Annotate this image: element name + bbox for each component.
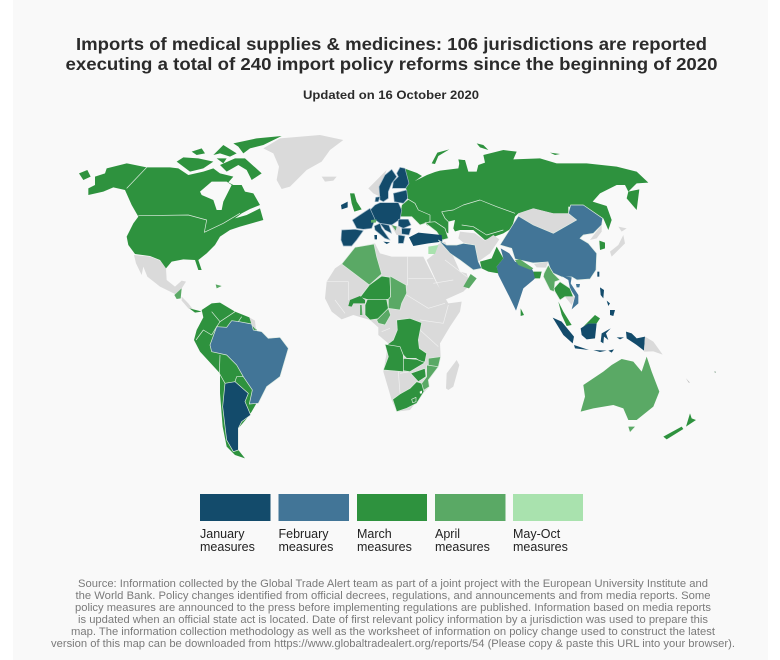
India (497, 248, 542, 311)
Africa and Arabia (325, 242, 470, 412)
Tasmania (628, 427, 635, 432)
grey base of Africa (325, 243, 462, 412)
Oman and Syria (428, 245, 477, 288)
source note: version of this map can be downloaded from https://www.globaltradealert.org/reports/54 (Please copy & paste this URL into your browser). (51, 638, 735, 650)
title: Imports of medical supplies & medicines: 106 jurisdictions are reported (76, 34, 707, 54)
Russia and Central Asia (403, 150, 648, 240)
legend: February (278, 494, 349, 554)
source note: is updated when an official state act is located. Date of first relevant policy information by a jurisdiction was used to prepare this (78, 614, 708, 626)
Bangladesh (533, 272, 542, 278)
Vietnam (562, 276, 578, 309)
legend: May-Oct: May-Oct (513, 527, 561, 541)
grey base of Arabia and Iraq (427, 242, 470, 299)
Democratic Republic of Congo (387, 318, 427, 363)
Denmark (375, 197, 380, 202)
legend: May-Oct (513, 494, 583, 554)
Mexico (134, 255, 186, 294)
Angola (383, 344, 403, 372)
Sulawesi (601, 328, 611, 343)
Arctic islands (432, 143, 560, 170)
Greenland and Iceland (263, 135, 343, 189)
Borneo (581, 323, 597, 339)
Belarus and Ukraine (400, 199, 430, 225)
legend: January: measures (200, 540, 255, 554)
Thailand and Laos (554, 282, 573, 300)
French Guiana (249, 317, 256, 330)
Croatia (380, 223, 392, 233)
Europe and Turkey (341, 167, 448, 246)
Northern Borneo (583, 315, 600, 327)
Algeria (342, 244, 382, 285)
Switzerland (371, 219, 377, 223)
Hudson Bay (200, 182, 232, 210)
Burkina Faso (348, 296, 365, 307)
title (66, 34, 718, 74)
Baltics (393, 190, 408, 203)
France (352, 208, 375, 229)
Japan (610, 227, 627, 257)
South and Southeast Asia (480, 247, 599, 326)
Turkey (409, 233, 442, 246)
Argentina (223, 382, 251, 452)
Greece (398, 235, 405, 243)
Lesotho (412, 397, 416, 403)
Germany Poland and central Europe (370, 203, 402, 225)
Brazil (210, 321, 288, 404)
source note: the World Bank. Policy changes identified from official decrees, regulations, and announcements and from media reports. Some (76, 590, 710, 602)
legend (200, 494, 583, 554)
Bosnia (392, 225, 397, 231)
South Korea (599, 241, 605, 250)
Canada-US border (127, 167, 147, 188)
Afghanistan and Iraq neighbours (458, 232, 499, 262)
Zimbabwe (411, 368, 426, 382)
Cameroon (377, 308, 391, 325)
internal borders (196, 312, 220, 340)
Central America (174, 284, 222, 313)
Philippines (600, 287, 615, 316)
grey country borders (327, 257, 467, 393)
source note: map. The information collection methodology as well as the worksheet of information on policy change used to construct the latest (71, 626, 715, 638)
Spain and Portugal (341, 229, 363, 246)
Papua New Guinea (644, 337, 663, 355)
New Caledonia (686, 378, 690, 383)
Madagascar (446, 360, 459, 390)
legend: March (357, 494, 427, 554)
Nigeria (365, 299, 388, 320)
Norway (368, 170, 387, 197)
Malay Peninsula (558, 302, 572, 326)
legend: April: April (435, 527, 460, 541)
Canada and United States (70, 163, 263, 270)
Eurasia north: Russia and China (403, 143, 648, 280)
legend: March: March (357, 527, 392, 541)
Caspian Sea (448, 220, 460, 243)
Hainan and Taiwan (576, 272, 599, 287)
Alaska islands and Arctic archipelago (79, 136, 282, 180)
legend: April: measures (435, 540, 490, 554)
title: executing a total of 240 import policy reforms since the beginning of 2020 (66, 54, 718, 74)
Caucasus (425, 222, 448, 240)
North Korea (590, 225, 602, 240)
Kazakhstan border (442, 200, 515, 213)
Finland (392, 167, 409, 188)
Myanmar (543, 265, 560, 292)
Italy (374, 223, 390, 240)
source note (51, 578, 735, 650)
legend: February: February (278, 527, 329, 541)
Niger (360, 276, 391, 299)
legend: February: measures (278, 540, 333, 554)
Chad (388, 276, 407, 310)
Ireland (341, 202, 348, 209)
Pakistan (480, 247, 503, 273)
Mozambique (422, 365, 438, 392)
Sri Lanka (521, 308, 524, 316)
Zambia (403, 358, 425, 372)
Sweden (379, 169, 397, 202)
Cambodia (565, 297, 575, 305)
legend: January: January (200, 527, 245, 541)
South America (194, 303, 288, 458)
Romania (398, 219, 411, 228)
Togo (360, 305, 362, 315)
Iran (438, 240, 482, 270)
legend: January (200, 494, 270, 554)
legend: March: measures (357, 540, 412, 554)
Eswatini (420, 391, 422, 394)
Kamchatka (627, 189, 639, 210)
world map (70, 135, 716, 458)
Tanzania (428, 357, 441, 372)
Sumatra and Java (553, 318, 624, 353)
source note: Source: Information collected by the Global Trade Alert team as part of a joint project with the European University Institute and (78, 578, 708, 590)
South Africa (393, 382, 424, 412)
North America (70, 135, 343, 294)
source note: policy measures are announced to the press before implementing regulations are published. Information based on media reports (75, 602, 712, 614)
legend: April (435, 494, 506, 554)
Papua (626, 332, 645, 351)
Bhutan (534, 262, 548, 268)
Bulgaria (402, 228, 411, 235)
Southeast Asia and Oceania (553, 287, 716, 439)
China (500, 205, 603, 280)
United Kingdom (350, 193, 362, 212)
subtitle: update date: Updated on 16 October 2020 (303, 88, 479, 102)
Nepal (515, 259, 533, 270)
New Zealand (663, 413, 696, 439)
Balkan states (391, 225, 402, 235)
legend: May-Oct: measures (513, 540, 568, 554)
Mongolia (518, 208, 577, 233)
Australia (581, 357, 659, 420)
